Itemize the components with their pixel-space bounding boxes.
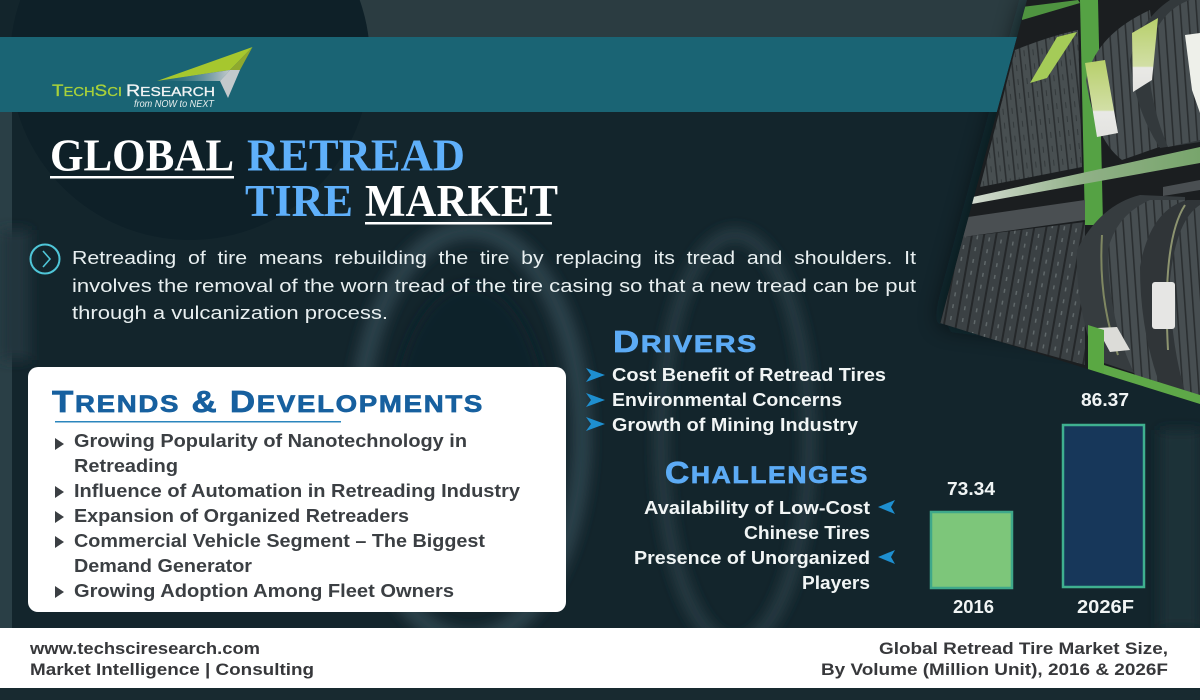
panel: trends and developments bbox=[28, 367, 566, 612]
panel: drivers bbox=[586, 324, 886, 435]
list: challenges: Availability of Low-Cost bbox=[644, 498, 870, 518]
list: trends: Influence of Automation in Retreading Industry bbox=[74, 481, 520, 501]
icons: challenge arrows bbox=[878, 500, 895, 564]
list: trends: Expansion of Organized Retreaders bbox=[74, 506, 409, 526]
heading: trends: TRENDS & D EVELOPMENTS bbox=[52, 384, 484, 419]
intro paragraph bbox=[72, 247, 916, 323]
photo: tire rack bbox=[930, 0, 1200, 410]
title: TIRE bbox=[245, 176, 353, 226]
lower grey bar bbox=[963, 200, 1085, 237]
bar: 2026F bbox=[1063, 425, 1144, 587]
list: challenges: Presence of Unorganized bbox=[634, 548, 870, 568]
bar chart: 86.37 bbox=[1081, 390, 1129, 410]
logo: TechSci Research: TECHSCI bbox=[52, 82, 122, 100]
shelf bbox=[972, 147, 1200, 204]
list: trends: Growing Adoption Among Fleet Owners bbox=[74, 581, 454, 601]
upper tire left bbox=[980, 30, 1082, 187]
footer: Global Retread Tire Market Size, bbox=[879, 640, 1168, 658]
footer: Market Intelligence | Consulting bbox=[30, 661, 314, 679]
list: trends: Retreading bbox=[74, 456, 178, 476]
heading: challenges: CHALLENGES bbox=[665, 455, 869, 490]
upper tire right bbox=[1130, 0, 1200, 148]
heading: drivers: DRIVERS bbox=[613, 324, 758, 359]
shadow near photo bbox=[940, 0, 1100, 340]
list: drivers: Cost Benefit of Retread Tires bbox=[612, 365, 886, 385]
list: drivers: Environmental Concerns bbox=[612, 390, 842, 410]
list: trends bbox=[55, 431, 520, 601]
title: GLOBAL bbox=[50, 130, 234, 180]
title bbox=[50, 130, 558, 226]
icon: chevron circle bbox=[30, 244, 60, 274]
bar: 2016 bbox=[931, 512, 1012, 588]
logo: TechSci Research: from NOW to NEXT bbox=[134, 99, 215, 110]
intro paragraph: involves the removal of the worn tread of the tire casing so that a new tread can be put bbox=[72, 275, 916, 296]
list: trends: Demand Generator bbox=[74, 556, 252, 576]
list: drivers bbox=[612, 365, 886, 435]
title: MARKET bbox=[365, 176, 558, 226]
lower tire A bbox=[1077, 195, 1185, 390]
footer: www.techsciresearch.com bbox=[29, 640, 260, 658]
title: RETREAD bbox=[247, 130, 465, 180]
list: challenges: Chinese Tires bbox=[744, 523, 870, 543]
post upper bbox=[1080, 0, 1103, 225]
post lower bbox=[1088, 325, 1104, 375]
header band bbox=[0, 37, 1017, 112]
list: challenges: Players bbox=[802, 573, 870, 593]
panel: challenges bbox=[634, 455, 895, 593]
bar chart: 73.34 bbox=[947, 479, 995, 499]
icons: driver arrows bbox=[586, 368, 605, 431]
lower left tread tires bbox=[940, 222, 1085, 365]
logo: TechSci Research: RESEARCH bbox=[126, 82, 215, 100]
bar chart bbox=[931, 390, 1144, 617]
top green rail bbox=[1022, 0, 1080, 20]
intro paragraph: through a vulcanization process. bbox=[72, 302, 388, 323]
upper tire middle bbox=[1086, 10, 1165, 160]
bar chart: 2016 bbox=[953, 597, 994, 617]
footer: By Volume (Million Unit), 2016 & 2026F bbox=[821, 661, 1168, 679]
bar chart: 2026F bbox=[1077, 597, 1134, 617]
list: drivers: Growth of Mining Industry bbox=[612, 415, 858, 435]
list: trends: Growing Popularity of Nanotechnology in bbox=[74, 431, 467, 451]
logo: TechSci Research bbox=[52, 47, 252, 110]
intro paragraph: Retreading of tire means rebuilding the tire by replacing its tread and shoulders. It bbox=[72, 247, 916, 268]
lower tire B bbox=[1140, 200, 1200, 400]
list: trends: Commercial Vehicle Segment – The Biggest bbox=[74, 531, 485, 551]
footer bbox=[0, 628, 1200, 688]
list: challenges bbox=[634, 498, 870, 593]
